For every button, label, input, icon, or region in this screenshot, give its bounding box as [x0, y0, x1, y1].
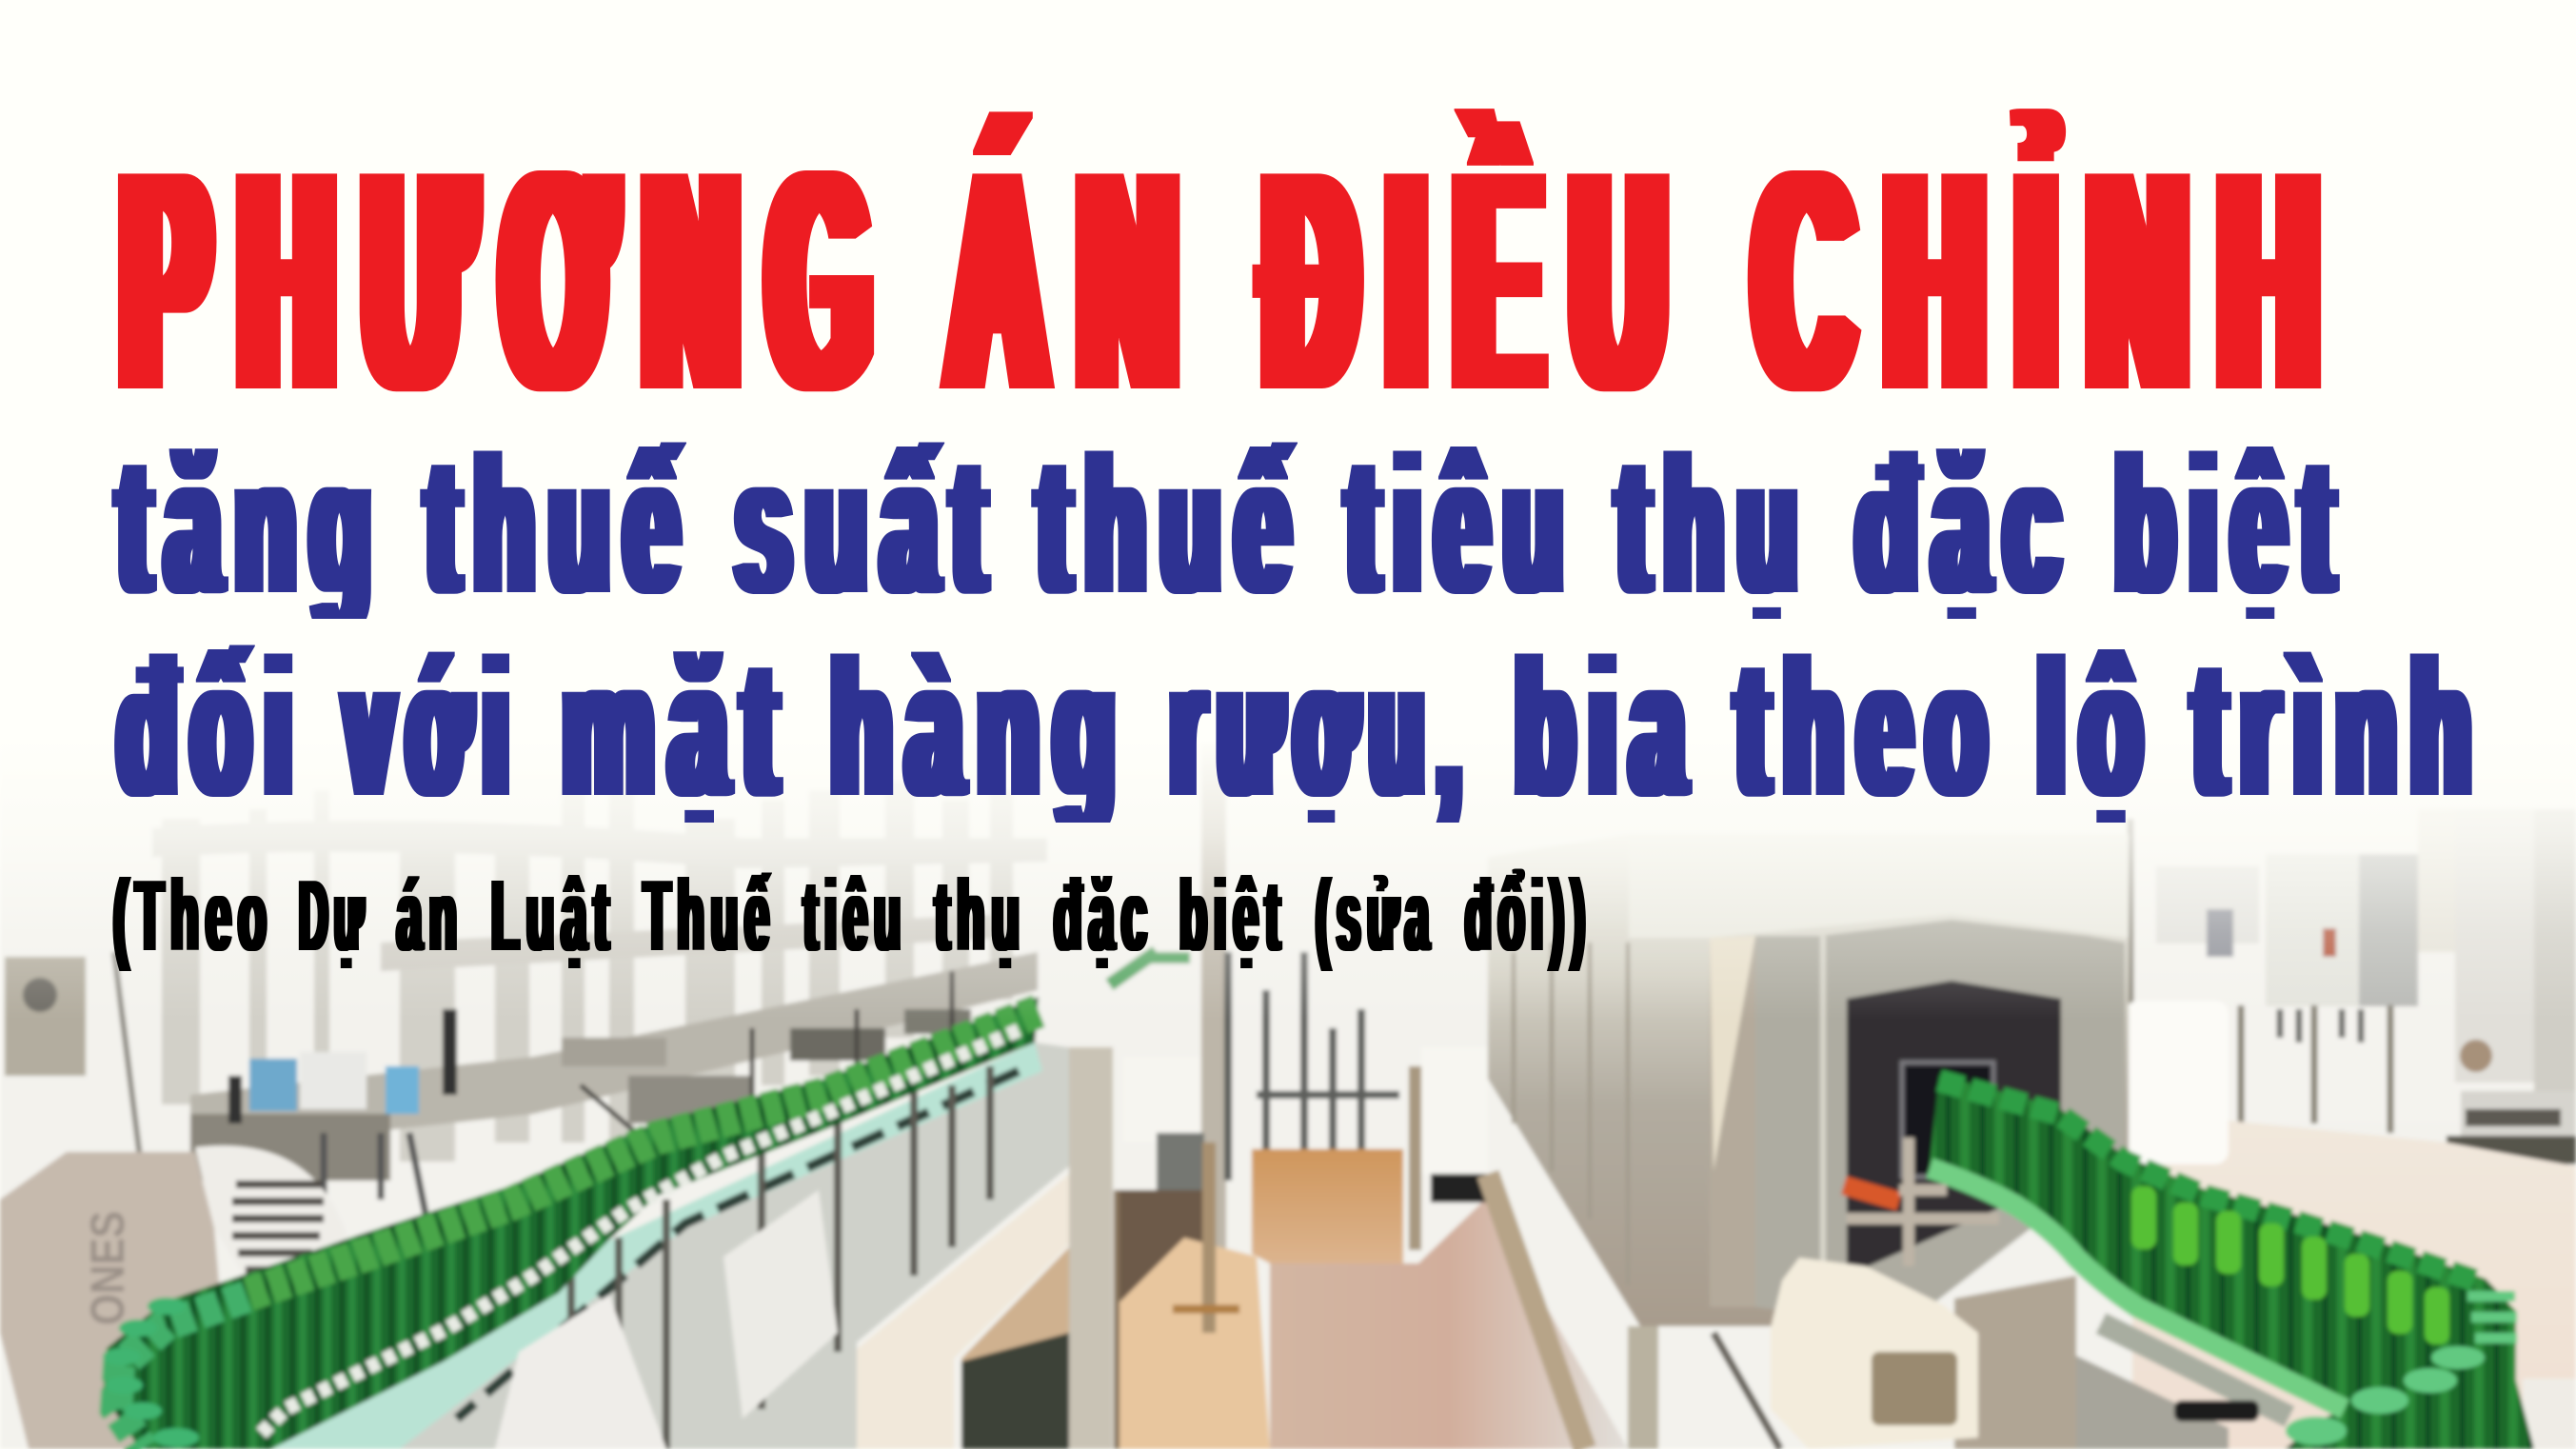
- right wall cabinets: [2129, 762, 2576, 1164]
- subtitle: line two: hàng: [831, 619, 1130, 837]
- source note: án: [397, 860, 464, 972]
- title: red headline: ĐIỀU: [1265, 106, 1696, 455]
- left bottle necks: [247, 1011, 1039, 1295]
- title: red headline: PHƯƠNG: [123, 106, 902, 455]
- support legs: [1488, 1174, 1585, 1449]
- photo text: machine brand: ONES: [81, 1211, 134, 1325]
- source note: (sửa: [1316, 860, 1436, 972]
- left bottles: [103, 997, 1039, 1449]
- motor grille: [1872, 1352, 1957, 1425]
- subtitle: line one: tiêu: [1347, 416, 1577, 634]
- central floor: [1252, 1149, 1403, 1263]
- conveyor frame under left bottles: [271, 1042, 1069, 1449]
- source note: đặc: [1054, 860, 1154, 972]
- subtitle: line two: rượu,: [1171, 619, 1475, 837]
- right bright bottle bellies: [2131, 1186, 2449, 1344]
- photo: brewery bottling line: [0, 743, 2576, 1449]
- right bottle caps: [2286, 1291, 2517, 1445]
- tunnel front panel: [1755, 920, 2125, 1326]
- photo back wall: [0, 743, 2576, 1449]
- subtitle: line two: theo: [1736, 619, 2001, 837]
- source note: (Theo: [113, 860, 273, 972]
- tunnel dark opening: [1847, 981, 2061, 1276]
- subtitle: line one: đặc: [1856, 416, 2075, 634]
- right motor: [1771, 1258, 1978, 1449]
- source note: Thuế: [644, 860, 776, 972]
- subtitle: line one: [111, 442, 2340, 619]
- tunnel-side white column: [1421, 1047, 1488, 1174]
- subtitle: line one: thụ: [1617, 416, 1812, 634]
- right bottle necks: [1939, 1081, 2475, 1280]
- subtitle: line one: tăng: [118, 416, 386, 634]
- source note: thụ: [935, 860, 1026, 972]
- source note: tiêu: [803, 860, 907, 972]
- source note: [113, 860, 1592, 972]
- subtitle: line two: đối: [118, 619, 307, 837]
- left teal bottle tops: [103, 1298, 199, 1447]
- central rail and frame: [857, 1174, 1069, 1449]
- bright green guide rail: [1930, 1168, 2345, 1409]
- central tall column: [1069, 1047, 1113, 1449]
- subtitle: line two: mặt: [563, 619, 793, 837]
- grey machine boxes: [1954, 1276, 2076, 1449]
- subtitle: line two: với: [345, 619, 522, 837]
- tunnel side band: [1710, 936, 1755, 1307]
- far background between column and tunnel: [1228, 952, 1399, 1181]
- source note: Dự: [299, 860, 369, 972]
- subtitle: line two: lộ: [2037, 619, 2157, 837]
- left bottle caps: [257, 1030, 1019, 1438]
- plank floor: [1118, 1238, 1270, 1449]
- stainless tunnel side wall: [1488, 834, 2129, 1326]
- orange handle and valves: [1844, 1185, 1899, 1201]
- right bottles: [1930, 1075, 2534, 1449]
- left motor housing: [0, 1152, 233, 1449]
- white drum: [2125, 1001, 2229, 1164]
- subtitle: line one: thuế: [426, 416, 694, 634]
- source note: biệt: [1179, 860, 1287, 972]
- subtitle: line one: suất: [736, 416, 1001, 634]
- infographic canvas: đổi)): [1465, 860, 1592, 972]
- fade of photo into cream background: [0, 734, 2576, 1020]
- subtitle: line one: thuế: [1038, 416, 1305, 634]
- subtitle: line one: biệt: [2115, 416, 2348, 634]
- title: red headline: ÁN: [949, 106, 1210, 455]
- subtitle: line two: [114, 645, 2472, 823]
- subtitle: line two: bia: [1516, 619, 1699, 837]
- concrete floor: [1270, 1200, 1628, 1449]
- source note: Luật: [491, 860, 616, 972]
- left wall and pipes: [5, 743, 1226, 1352]
- right floor: [2132, 1111, 2576, 1449]
